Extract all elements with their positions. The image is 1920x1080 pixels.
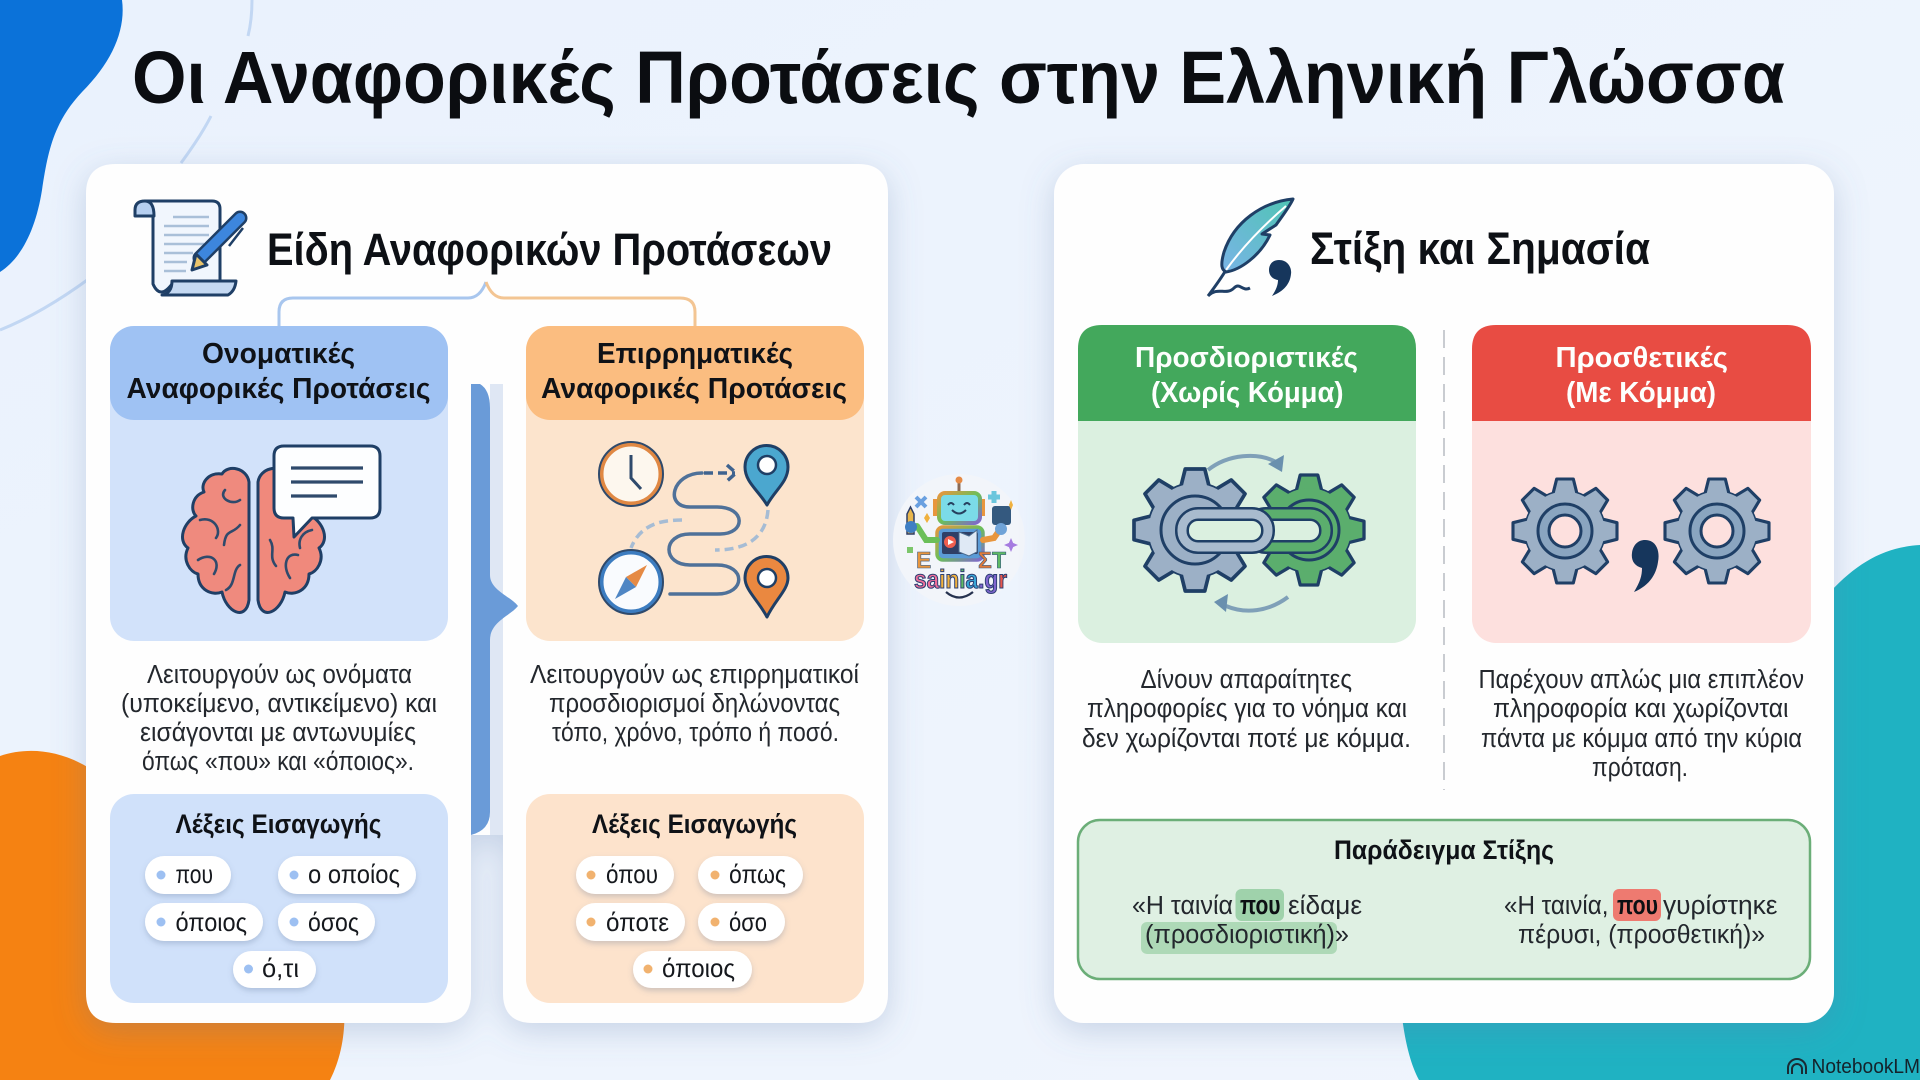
heading: punctuation: Στίξη και Σημασία <box>1310 223 1650 274</box>
adverbial header text: Επιρρηματικές <box>597 338 793 370</box>
nominal description: όπως «που» και «όποιος». <box>142 748 414 776</box>
chip: όσος: όσος <box>308 907 359 937</box>
adverbial description <box>530 661 859 747</box>
panel: punctuation and meaning <box>1054 164 1834 1023</box>
keyword box: nominal: Λέξεις Εισαγωγής <box>176 809 382 839</box>
non-restrictive header text <box>1556 342 1728 409</box>
restrictive description: δεν χωρίζονται ποτέ με κόμμα. <box>1082 725 1411 753</box>
clock <box>599 442 663 506</box>
non-restrictive description: Παρέχουν απλώς μια επιπλέον <box>1478 666 1804 694</box>
restrictive header <box>1078 325 1416 421</box>
blob: blue top-left <box>0 0 123 272</box>
panel: restrictive <box>1078 325 1416 753</box>
panel: nominal clauses <box>110 326 448 1003</box>
robot letters: Ε <box>916 547 931 573</box>
icon: brain and speech bubble <box>183 446 380 612</box>
restrictive header text: (Χωρίς Κόμμα) <box>1151 377 1344 409</box>
nominal header text: Αναφορικές Προτάσεις <box>126 373 430 405</box>
logo: sainia.gr robot <box>893 474 1025 606</box>
icon: scroll and pen <box>135 201 243 295</box>
nominal description <box>121 661 437 776</box>
restrictive description <box>1082 666 1411 753</box>
adverbial header text <box>541 338 847 405</box>
non-restrictive header text: (Με Κόμμα) <box>1566 377 1716 409</box>
panel: punctuation example <box>1078 820 1810 979</box>
logo: sainia.gr robot: Τ <box>992 547 1006 573</box>
chip: ο οποίος <box>278 856 416 894</box>
chip: όποτε: όποτε <box>606 907 669 937</box>
example: restrictive sentence: είδαμε <box>1288 892 1362 920</box>
nominal header <box>110 326 448 420</box>
robot body <box>937 527 983 560</box>
title: Οι Αναφορικές Προτάσεις στην Ελληνική Γλώσσα <box>132 36 1785 119</box>
nominal description: εισάγονται με αντωνυμίες <box>140 719 416 747</box>
chip: ό,τι: ό,τι <box>262 953 299 983</box>
icon: feather with comma <box>1208 199 1293 296</box>
example: non-restrictive sentence: που <box>1617 892 1658 920</box>
keyword box: nominal <box>110 794 448 1003</box>
adverbial panel body <box>526 326 864 641</box>
icon: linked gears <box>1134 455 1364 612</box>
adverbial header <box>526 326 864 420</box>
example: non-restrictive sentence <box>1504 889 1778 949</box>
panel: types of relative clauses <box>86 164 888 1023</box>
restrictive header text: Προσδιοριστικές <box>1135 342 1358 374</box>
nominal header text: Ονοματικές <box>202 338 355 370</box>
example: restrictive sentence: «Η ταινία <box>1132 892 1233 920</box>
heading: types: Είδη Αναφορικών Προτάσεων <box>267 224 832 275</box>
example heading: Παράδειγμα Στίξης <box>1334 835 1554 865</box>
logo text: sainia.gr <box>914 564 1007 594</box>
non-restrictive description <box>1478 666 1804 782</box>
chip: όπως <box>698 856 803 894</box>
card background left <box>86 164 888 1023</box>
arrow bar: nominal to adverbial <box>471 384 518 835</box>
chip: που <box>145 856 231 894</box>
keyword box: adverbial: Λέξεις Εισαγωγής <box>592 809 797 839</box>
chip: όπου: όπου <box>606 859 658 889</box>
adverbial description: τόπο, χρόνο, τρόπο ή ποσό. <box>552 719 839 747</box>
chip: που: που <box>176 859 213 889</box>
nominal description: Λειτουργούν ως ονόματα <box>147 661 412 689</box>
non-restrictive description: πάντα με κόμμα από την κύρια <box>1481 725 1802 753</box>
sparkles <box>988 491 1000 503</box>
chip: όποιος: όποιος <box>176 907 247 937</box>
icon: gears with comma <box>1513 479 1769 592</box>
chip: όποτε <box>576 903 685 941</box>
nominal description: (υποκείμενο, αντικείμενο) και <box>121 690 437 718</box>
example: restrictive sentence <box>1132 889 1362 954</box>
robot arms <box>917 526 937 540</box>
example: restrictive sentence: που <box>1240 892 1280 920</box>
nominal panel body <box>110 326 448 641</box>
chip: όσος <box>278 903 375 941</box>
chip: όπως: όπως <box>729 859 786 889</box>
restrictive panel body <box>1078 325 1416 643</box>
chip: όποιος: όποιος <box>662 953 735 983</box>
chip: όποιος <box>145 903 263 941</box>
panel: non-restrictive <box>1472 325 1811 782</box>
chip: όπου <box>576 856 674 894</box>
non-restrictive description: πληροφορία και χωρίζονται <box>1493 695 1788 723</box>
panel: adverbial clauses <box>526 326 864 1003</box>
orange pin <box>745 556 788 617</box>
non-restrictive header text: Προσθετικές <box>1556 342 1728 374</box>
keyword box: adverbial <box>526 794 864 1003</box>
chip: ό,τι <box>233 951 316 988</box>
restrictive header text <box>1135 342 1358 409</box>
chip: όσο: όσο <box>729 907 767 937</box>
blob: teal right <box>1397 545 1920 1080</box>
background curve: upper arc <box>181 0 252 163</box>
example: non-restrictive sentence: γυρίστηκε <box>1663 892 1778 920</box>
adverbial description: προσδιορισμοί δηλώνοντας <box>549 690 840 718</box>
blue pin <box>745 446 788 505</box>
adverbial header text: Αναφορικές Προτάσεις <box>541 373 847 405</box>
robot head <box>939 493 980 523</box>
gap shading strip <box>490 384 503 835</box>
non-restrictive description: πρόταση. <box>1592 754 1688 782</box>
background curve: lower arc <box>0 278 90 330</box>
connector: blue branch <box>279 282 486 326</box>
icon: route with clock, compass and pins <box>599 442 788 617</box>
example: non-restrictive sentence: πέρυσι, (προσθετική)» <box>1518 921 1765 949</box>
robot ears <box>934 500 984 515</box>
chip: όσο <box>698 903 785 941</box>
non-restrictive header <box>1472 325 1811 421</box>
example: restrictive sentence: (προσδιοριστική)» <box>1145 921 1349 949</box>
restrictive description: πληροφορίες για το νόημα και <box>1087 695 1407 723</box>
chip: όποιος <box>633 951 752 988</box>
connector: orange branch <box>486 282 695 326</box>
example: non-restrictive sentence: «Η ταινία, <box>1504 892 1608 920</box>
adverbial description: Λειτουργούν ως επιρρηματικοί <box>530 661 859 689</box>
robot props: pencil and chip <box>907 507 914 534</box>
non-restrictive panel body <box>1472 325 1811 643</box>
divider <box>1443 330 1445 790</box>
logo: sainia.gr robot: Σ <box>978 547 992 573</box>
chip: ο οποίος: ο οποίος <box>308 859 400 889</box>
nominal header text <box>126 338 430 405</box>
card background right <box>1054 164 1834 1023</box>
blob: orange bottom-left <box>0 751 344 1080</box>
robot antenna <box>958 483 960 492</box>
compass <box>599 550 663 614</box>
restrictive description: Δίνουν απαραίτητες <box>1140 666 1352 694</box>
